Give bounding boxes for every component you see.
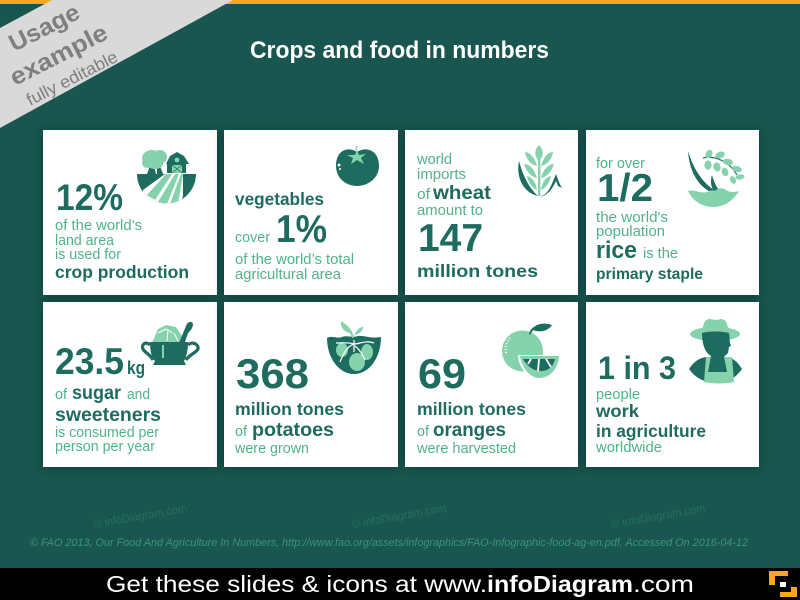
text: land area [55, 218, 189, 282]
footer text: infoDiagram [487, 571, 633, 597]
text: agricultural area: agricultural area [235, 267, 342, 283]
text: rice is the primary staple: rice [596, 237, 637, 264]
panel: rice [586, 130, 759, 295]
title: Crops and food in numbers [250, 37, 549, 64]
stat: 12%: 12% [56, 177, 123, 218]
icon: farm [137, 150, 196, 204]
text: sugar and sweeteners: sugar [72, 382, 121, 404]
watermarks: © infoDiagram.com [351, 503, 447, 531]
panel: agriculture workers [586, 302, 759, 467]
icon: potato plant [327, 321, 381, 374]
text: people work in agriculture: in agriculture [596, 421, 706, 441]
icon: sugar bowl [143, 322, 198, 365]
text: people work in agriculture: worldwide [595, 440, 662, 456]
text: sugar and sweeteners: sweeteners [55, 404, 161, 426]
text: world imports of wheat: imports [417, 167, 466, 183]
source citation: © FAO 2013, Our Food And Agriculture In Numbers, http://www.fao.org/assets/infographics/FAO-Infographic-food-ag-en.pdf, Accessed On 2016-04-12 [30, 537, 748, 549]
usage example banner: example [5, 19, 112, 91]
text: million tones of oranges: of [417, 424, 430, 440]
text: the world's population: population [596, 224, 665, 240]
text: world imports of wheat: wheat [432, 182, 492, 204]
text: million tones of oranges [416, 399, 526, 457]
usage example banner: Usage [4, 0, 84, 57]
panel: vegetables [224, 130, 398, 295]
top orange strip [0, 0, 800, 4]
icon: rice [688, 149, 745, 207]
text: sugar and sweeteners: is consumed per [55, 425, 159, 441]
text: vegetables: vegetables [235, 189, 324, 209]
text: million tones: million tones [417, 261, 538, 281]
text: sugar and sweeteners: and [127, 387, 150, 403]
usage example banner [0, 0, 233, 128]
panel: sugar [43, 302, 217, 467]
usage example banner: fully editable [23, 47, 121, 110]
text: cover: cover [235, 230, 270, 246]
watermarks: © infoDiagram.com [92, 503, 188, 531]
text: million tones of oranges: were harvested [416, 441, 516, 457]
text: the world's population [596, 210, 668, 240]
text: sugar and sweeteners [55, 382, 161, 455]
stat: 1/2: 1/2 [597, 167, 653, 210]
text: land area: is used for [55, 247, 121, 263]
text: people work in agriculture [595, 387, 706, 456]
icon: tomato [336, 146, 379, 186]
panel: potatoes [224, 302, 398, 467]
text: million tones of potatoes: of [235, 424, 248, 440]
text: million tones of potatoes: million tones [235, 399, 344, 419]
text: million tones of oranges: million tones [417, 399, 526, 419]
panel: wheat [405, 130, 578, 295]
text: rice is the primary staple [596, 237, 703, 283]
icon: orange [502, 324, 561, 378]
icon: farmer [689, 319, 742, 384]
text: million tones of oranges: oranges [433, 419, 506, 441]
panel: crop production [43, 130, 217, 295]
text: world imports of wheat: amount to [417, 203, 483, 219]
stat: 23.5kg: 23.5 [55, 341, 124, 382]
text: agricultural area: of the world’s total [235, 252, 354, 268]
text: million tones of potatoes: potatoes [252, 419, 334, 441]
text: million tones of potatoes: were grown [234, 441, 309, 457]
text: people work in agriculture: people [596, 387, 640, 403]
text: sugar and sweeteners: of [55, 387, 68, 403]
text: sugar and sweeteners: person per year [55, 439, 155, 455]
footer bar [0, 568, 800, 600]
stat: 23.5kg: kg [127, 358, 145, 378]
text: world imports of wheat [416, 152, 492, 219]
text: land area: crop production [55, 262, 189, 282]
panel: oranges [405, 302, 578, 467]
stat: 368: 368 [236, 350, 309, 397]
footer text: Get these slides & icons at www. [106, 571, 487, 597]
text: land area: land area [55, 233, 115, 249]
text: agricultural area [235, 252, 354, 283]
text: world imports of wheat: world [416, 152, 452, 168]
stat: 69: 69 [418, 350, 466, 397]
text: rice is the primary staple: is the [643, 246, 678, 262]
text: rice is the primary staple: primary staple [596, 266, 703, 283]
footer text: .com [633, 571, 694, 597]
text: world imports of wheat: of [417, 187, 431, 203]
icon: infoDiagram logo [769, 571, 797, 597]
text: land area: of the world’s [55, 218, 142, 234]
text: people work in agriculture: work [595, 401, 639, 421]
text: for over: for over [596, 156, 645, 172]
text: million tones of potatoes [234, 399, 344, 457]
stat: 1%: 1% [276, 208, 327, 251]
watermarks [92, 503, 706, 531]
footer text [106, 571, 694, 597]
stat: 1 in 3: 1 in 3 [598, 350, 676, 386]
text: the world's population: the world's [596, 210, 668, 226]
icon: wheat [518, 145, 562, 197]
stat: 147: 147 [418, 217, 483, 260]
watermarks: © infoDiagram.com [610, 503, 706, 531]
